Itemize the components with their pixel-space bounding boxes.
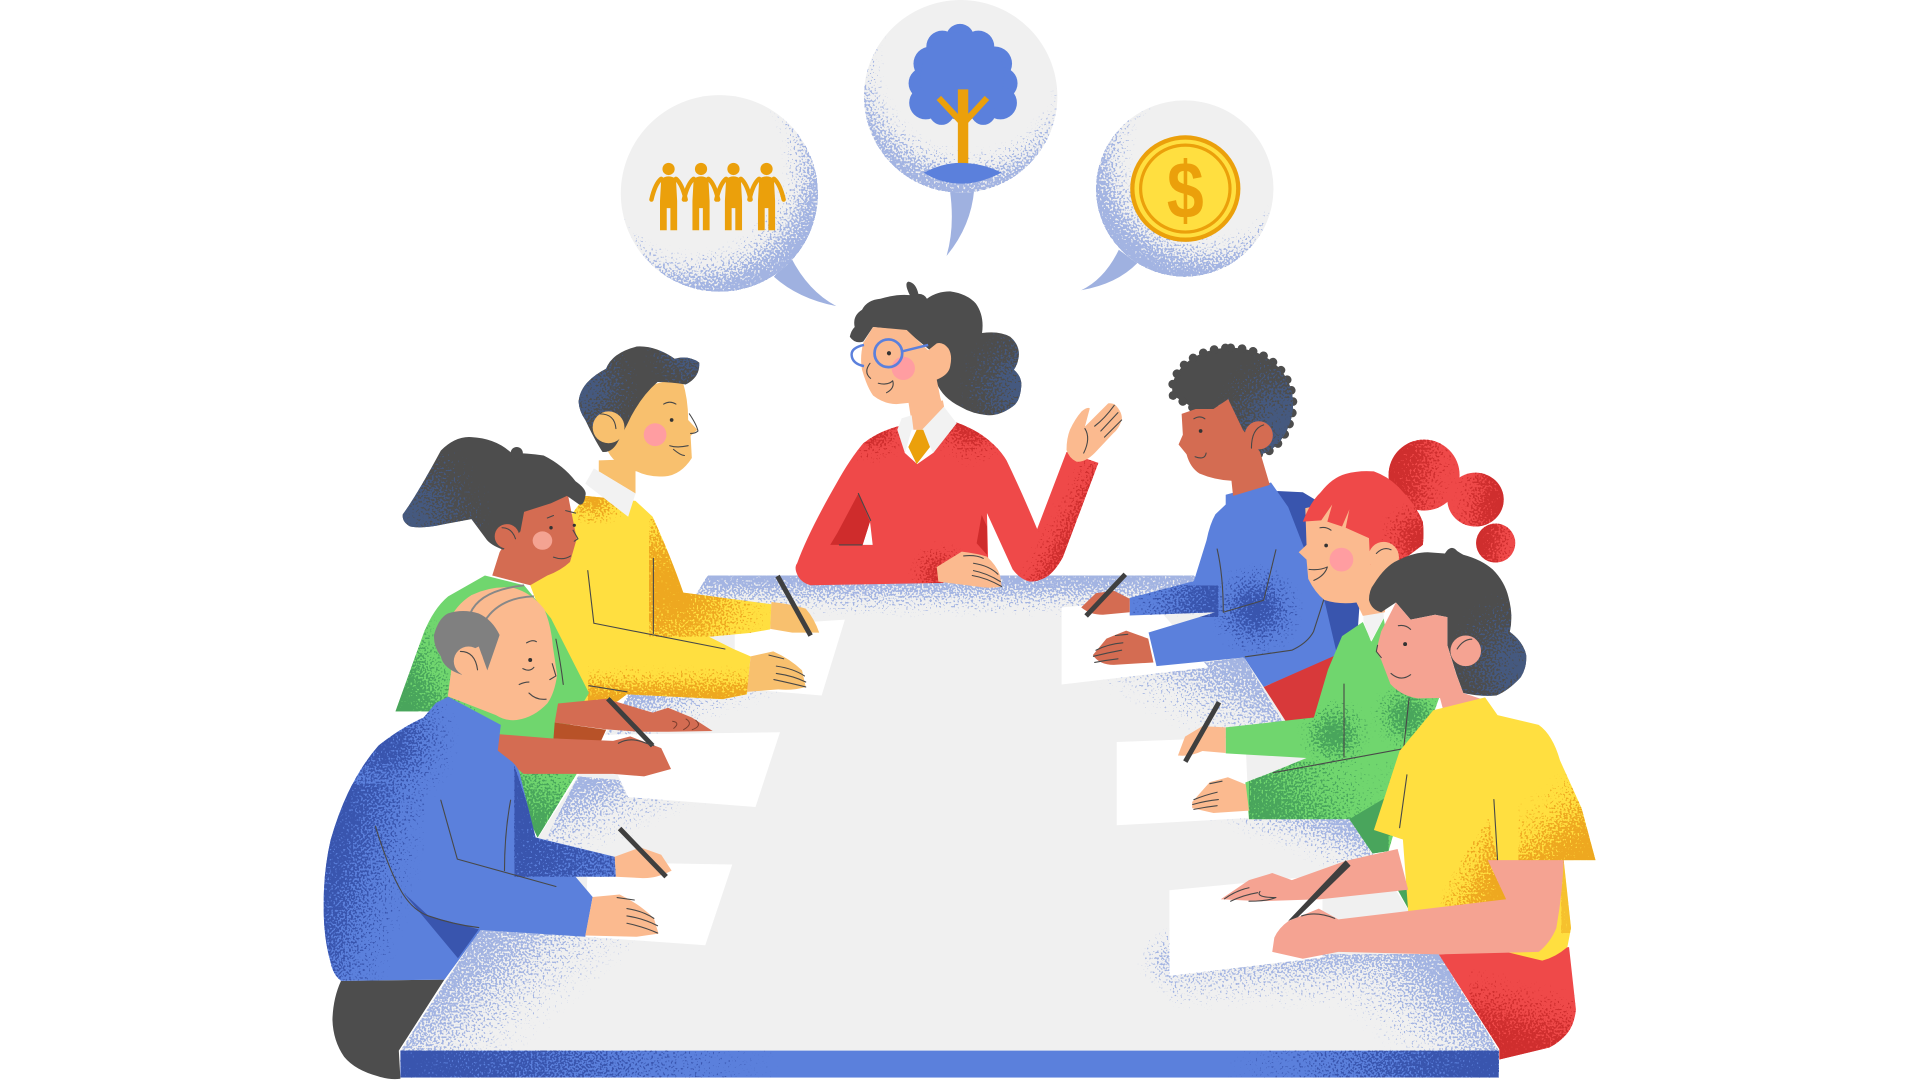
green woman hair <box>398 435 586 550</box>
red ponytail <box>1384 438 1518 566</box>
yellow-top woman hair <box>1369 548 1531 698</box>
person: red-haired woman in green <box>1178 438 1518 909</box>
yellow sweater <box>527 490 778 705</box>
icon: dollar coin <box>1130 135 1240 242</box>
person: woman in yellow top <box>1221 548 1598 1063</box>
green woman upper arm <box>553 699 713 743</box>
leader raised hand <box>1067 403 1122 462</box>
leader glasses and facial features <box>852 339 928 393</box>
red skirt <box>1264 655 1341 722</box>
icon: tree <box>909 24 1018 184</box>
person: curly-haired man in blue <box>1081 348 1360 687</box>
meeting table <box>400 576 1499 1078</box>
speech bubble: tree <box>864 0 1057 256</box>
leader hair <box>850 282 1029 422</box>
older man sweater <box>321 697 616 986</box>
red-haired woman hands and pen <box>1178 702 1249 813</box>
green woman face <box>492 490 577 585</box>
curly man face <box>1179 399 1270 496</box>
older man hands and pen <box>585 828 672 937</box>
older man ear and features <box>454 641 556 699</box>
yellow-top woman front arm <box>1272 860 1564 959</box>
red-haired woman hair <box>1302 471 1424 565</box>
yellow man hands and pen <box>747 576 819 692</box>
person: man with yellow sweater <box>527 343 819 705</box>
red-haired woman green sweater <box>1226 618 1445 909</box>
curly man dark shoulder <box>1277 491 1360 655</box>
curly man hair <box>1172 348 1298 459</box>
green sweater <box>392 576 589 839</box>
red-haired woman ear and features <box>1309 527 1399 580</box>
curly man ear and features <box>1194 417 1273 458</box>
yellow-top woman back arm <box>1221 849 1408 901</box>
older man grey hair <box>434 611 500 675</box>
leader collar and tie <box>897 400 957 464</box>
yellow man neck, collar and face <box>585 380 697 517</box>
curly man hands and pen <box>1081 574 1153 665</box>
leader hand on table <box>937 552 1002 588</box>
red-haired woman face <box>1299 502 1389 616</box>
green woman ear and features <box>495 511 578 559</box>
yellow-top woman skirt <box>1439 947 1580 1063</box>
yellow man ear and features <box>593 402 698 456</box>
yellow-top woman ear and features <box>1376 625 1481 678</box>
yellow-top woman face <box>1376 602 1485 716</box>
person: team leader <box>796 282 1122 588</box>
leader face <box>861 327 951 422</box>
leader sweater <box>796 416 1108 588</box>
curly man sweater <box>1130 482 1337 687</box>
person: older man in blue <box>321 585 672 1079</box>
icon: dollar coin: $ <box>1167 145 1204 235</box>
icon: four people holding hands <box>651 163 784 230</box>
yellow-top woman shirt <box>1374 697 1598 961</box>
older man trousers <box>332 980 444 1079</box>
person: woman with green sweater <box>392 435 713 839</box>
table front edge <box>400 1051 1499 1078</box>
yellow man hair <box>576 343 704 453</box>
speech bubble: people <box>621 95 836 306</box>
red-haired woman collar <box>1363 600 1384 641</box>
older man head <box>448 585 557 720</box>
green woman lower arm and pen <box>496 699 671 776</box>
papers on the table <box>585 600 1322 976</box>
yellow-top woman hand lines and pen <box>1224 860 1351 921</box>
speech bubble: money <box>1081 100 1273 290</box>
